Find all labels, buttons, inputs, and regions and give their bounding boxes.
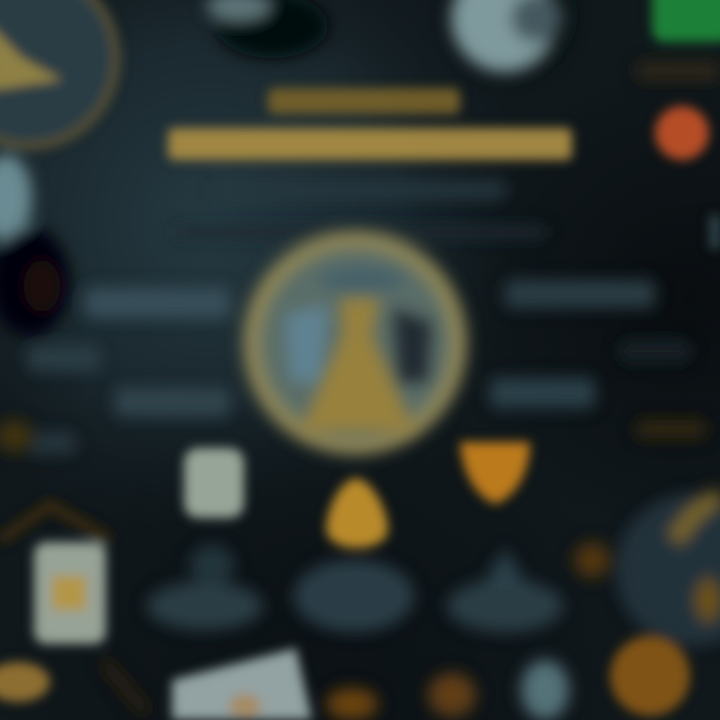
icon: top-left globe [0, 0, 116, 146]
icon: orange shield [460, 442, 530, 504]
icon: bottom pale blue figure [521, 660, 569, 720]
title line 2 [168, 128, 572, 160]
icon: bottom-left amber pill [0, 662, 50, 702]
title [168, 88, 572, 160]
icon: left pale orb and dark circle [0, 154, 70, 336]
icon: right edge mark [710, 215, 720, 249]
right base icon [447, 548, 563, 632]
right label 1 [505, 280, 655, 308]
title line 1 [268, 88, 460, 114]
left label 4 [28, 432, 76, 454]
left labels [28, 288, 230, 454]
icon: small amber dot [574, 542, 610, 578]
icon: pale card [184, 448, 244, 518]
icon: orange status dot [655, 106, 709, 160]
left label 2 [28, 345, 100, 371]
right label 3 [490, 378, 595, 408]
icon: small brown left mark [0, 420, 32, 452]
icon: bottom pale card [172, 648, 312, 720]
icon: gold drop [326, 478, 388, 548]
icon: top pale circle [448, 0, 572, 76]
label: brown side line [636, 62, 720, 80]
emblem gold figure [300, 298, 415, 432]
icon: green status badge [652, 0, 720, 42]
right label 4 [636, 420, 706, 438]
central emblem [243, 231, 467, 455]
subtitle [175, 182, 545, 238]
emblem side panels [285, 268, 432, 385]
icon: bottom amber marks [326, 673, 476, 720]
right label 2 [620, 340, 690, 362]
right labels [490, 280, 706, 438]
left label 3 [115, 388, 230, 416]
left label 1 [85, 288, 230, 318]
left base icon [147, 545, 263, 630]
icon: left tag with connector [0, 505, 110, 644]
connector: brown diagonal [104, 662, 146, 712]
icon: amber coin [610, 636, 690, 716]
icon: bottom-right globe [616, 488, 720, 646]
center base icon [294, 560, 414, 632]
icon: top dark badge [206, 0, 328, 58]
